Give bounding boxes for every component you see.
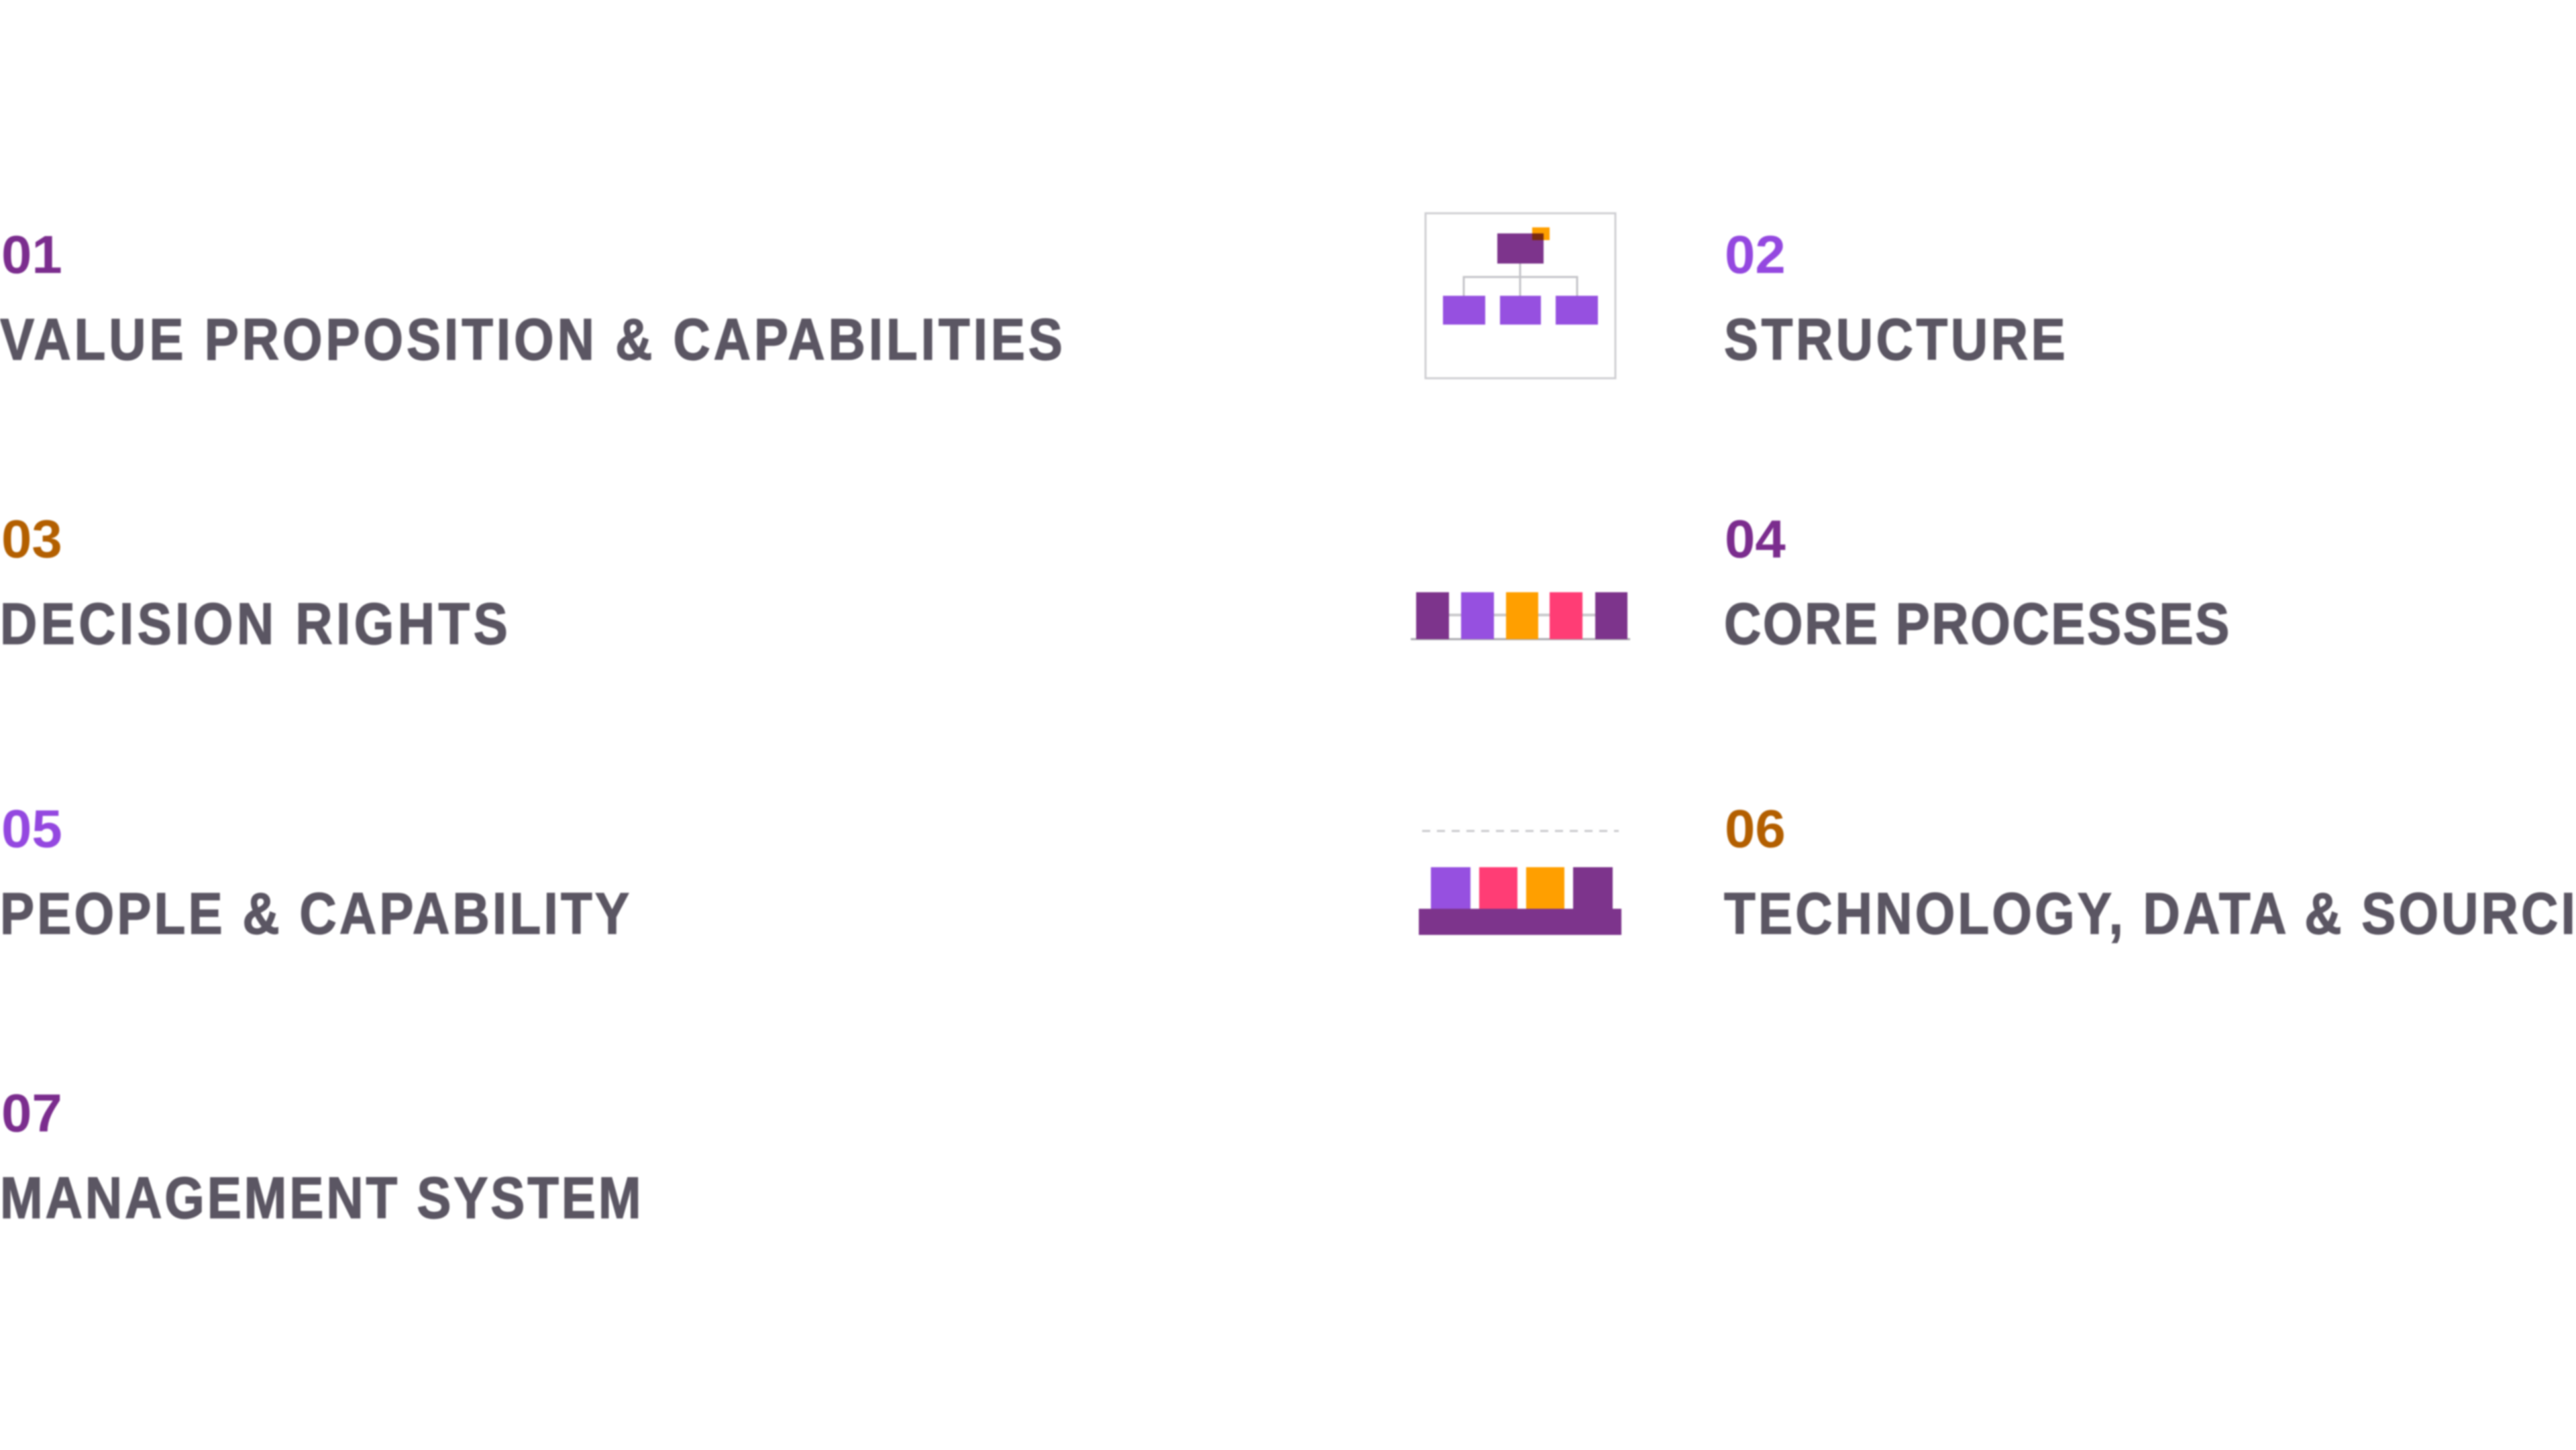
label: core processes: CORE PROCESSES: [1724, 592, 2229, 657]
item 02: structure: [1724, 225, 2065, 372]
label: management system: MANAGEMENT SYSTEM: [0, 1166, 641, 1231]
icon: org chart: [1426, 213, 1615, 378]
item 06: technology, data and sourcing: [1724, 799, 2576, 946]
number 03: 03: [1, 510, 62, 569]
number 05: 05: [1, 799, 62, 859]
label: people and capability: PEOPLE & CAPABILITY: [0, 881, 629, 946]
number 04: 04: [1725, 510, 1786, 569]
item 07: management system: [0, 1084, 641, 1231]
item 03: decision rights: [0, 510, 508, 657]
label: structure: STRUCTURE: [1724, 307, 2065, 372]
item 04: core processes: [1724, 510, 2229, 657]
icon: process bars on a line: [1411, 592, 1630, 639]
item 05: people and capability: [0, 799, 629, 946]
number 07: 07: [1, 1084, 62, 1144]
label: decision rights: DECISION RIGHTS: [0, 592, 508, 657]
label: value proposition: VALUE PROPOSITION & CAPABILITIES: [0, 307, 1063, 372]
number 06: 06: [1725, 799, 1786, 859]
item 01: value proposition and capabilities: [0, 225, 1063, 372]
icon: platform with blocks: [1419, 831, 1621, 935]
number 01: 01: [1, 225, 62, 285]
number 02: 02: [1725, 225, 1786, 285]
